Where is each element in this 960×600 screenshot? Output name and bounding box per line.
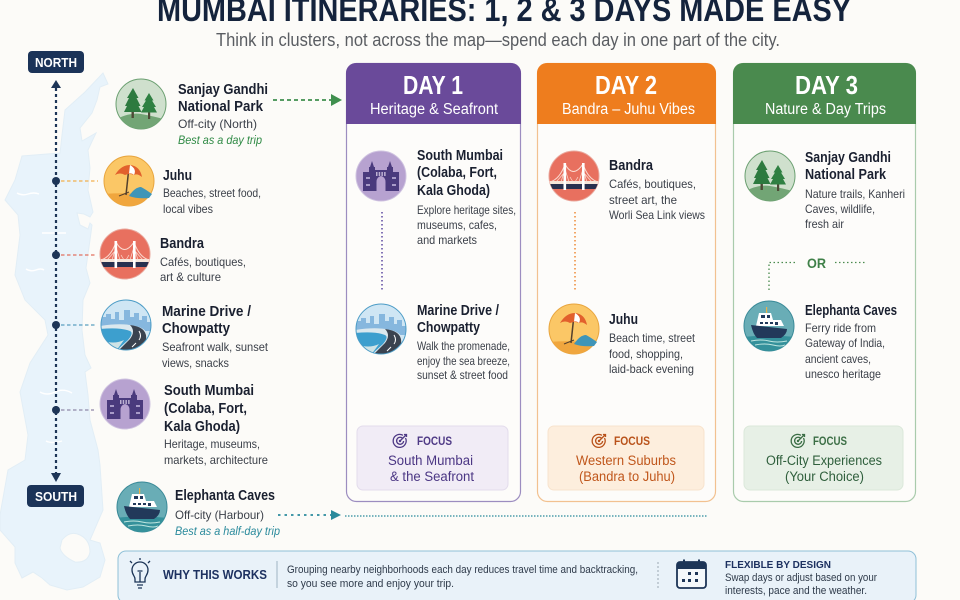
location: South Mumbai: (Colaba, Fort, bbox=[164, 401, 247, 417]
stop: Marine Drive: Marine Drive / bbox=[417, 303, 499, 319]
stop: South Mumbai: and markets bbox=[417, 233, 477, 247]
location: Bandra: Cafés, boutiques, bbox=[160, 255, 246, 269]
stop: Elephanta Caves bbox=[743, 301, 897, 381]
day 3 header: Nature & Day Trips bbox=[765, 101, 886, 118]
badge: north: NORTH bbox=[35, 56, 77, 70]
stop: Elephanta Caves: Elephanta Caves bbox=[805, 303, 897, 319]
focus: day 1: South Mumbai bbox=[388, 453, 473, 468]
location: Juhu: local vibes bbox=[163, 202, 213, 216]
stop: Bandra: street art, the bbox=[609, 193, 677, 207]
location: Elephanta Caves: Off-city (Harbour) bbox=[175, 508, 264, 522]
stop: Juhu: laid-back evening bbox=[609, 362, 694, 376]
stop: Marine Drive: Walk the promenade, bbox=[417, 339, 510, 353]
location: Sanjay Gandhi National Park bbox=[115, 79, 268, 147]
location: Sanjay Gandhi National Park: Off-city (North) bbox=[178, 117, 257, 131]
location: Marine Drive bbox=[100, 300, 269, 370]
focus: day 2: (Bandra to Juhu) bbox=[579, 469, 675, 484]
location: Marine Drive: Marine Drive / bbox=[162, 304, 251, 320]
location: Juhu: Beaches, street food, bbox=[163, 186, 261, 200]
stop: South Mumbai bbox=[356, 148, 516, 247]
map: Mumbai coastline bbox=[0, 73, 108, 590]
badge: north bbox=[28, 51, 84, 73]
location: South Mumbai: markets, architecture bbox=[164, 453, 268, 467]
stop: South Mumbai: South Mumbai bbox=[417, 148, 503, 164]
location: Juhu bbox=[103, 156, 261, 216]
day 1 header bbox=[346, 63, 521, 124]
why text bbox=[287, 564, 638, 590]
flexible by design: Swap days or adjust based on your bbox=[725, 572, 877, 584]
location: Elephanta Caves bbox=[116, 482, 280, 538]
subtitle: Think in clusters, not across the map—spend each day in one part of the city. bbox=[216, 30, 780, 50]
flexible by design: FLEXIBLE BY DESIGN bbox=[725, 559, 831, 571]
location: Bandra: art & culture bbox=[160, 270, 221, 284]
location: Sanjay Gandhi National Park: Sanjay Gandhi bbox=[178, 82, 268, 98]
stop: Sanjay Gandhi National Park: National Park bbox=[805, 167, 887, 183]
footer: why this works bbox=[118, 551, 916, 600]
stop: Marine Drive: sunset & street food bbox=[417, 368, 508, 382]
day 2 header: Bandra – Juhu Vibes bbox=[562, 101, 695, 118]
stop: Juhu: Juhu bbox=[609, 312, 638, 328]
stop: Sanjay Gandhi National Park: fresh air bbox=[805, 217, 844, 231]
stop: South Mumbai: Explore heritage sites, bbox=[417, 203, 516, 217]
stop: Marine Drive: enjoy the sea breeze, bbox=[417, 354, 510, 368]
stop: Juhu: food, shopping, bbox=[609, 347, 683, 361]
stop: South Mumbai: Kala Ghoda) bbox=[417, 183, 490, 199]
panel: day 1 bbox=[346, 63, 521, 502]
focus: day 3 bbox=[744, 426, 903, 490]
stop: Elephanta Caves: Ferry ride from bbox=[805, 321, 876, 335]
focus: day 1: FOCUS bbox=[417, 436, 452, 448]
stop: Bandra bbox=[548, 151, 705, 222]
north-south axis bbox=[51, 80, 98, 482]
focus: day 3: Off-City Experiences bbox=[766, 453, 882, 468]
location: Marine Drive: views, snacks bbox=[162, 356, 229, 370]
stop: Juhu: Beach time, street bbox=[609, 331, 696, 345]
location: Sanjay Gandhi National Park: National Park bbox=[178, 99, 264, 115]
stop: Marine Drive bbox=[355, 303, 510, 382]
focus: day 2: FOCUS bbox=[614, 436, 650, 448]
why text: so you see more and enjoy your trip. bbox=[287, 578, 454, 590]
day 2 header: DAY 2 bbox=[595, 70, 657, 100]
stop: South Mumbai: (Colaba, Fort, bbox=[417, 165, 497, 181]
location: Elephanta Caves: Best as a half-day trip bbox=[175, 524, 280, 538]
panel: day 2 bbox=[537, 63, 716, 502]
focus: day 3: (Your Choice) bbox=[785, 469, 864, 484]
location: Marine Drive: Seafront walk, sunset bbox=[162, 340, 269, 354]
day 2 header bbox=[537, 63, 716, 124]
stop: Sanjay Gandhi National Park: Sanjay Gandhi bbox=[805, 150, 891, 166]
stop: Elephanta Caves: Gateway of India, bbox=[805, 336, 885, 350]
focus: day 2 bbox=[548, 426, 704, 490]
stop: Elephanta Caves: unesco heritage bbox=[805, 367, 881, 381]
stop: Juhu bbox=[548, 304, 696, 376]
badge: south: SOUTH bbox=[35, 490, 77, 504]
location: Sanjay Gandhi National Park: Best as a day trip bbox=[178, 133, 262, 147]
focus: day 3: FOCUS bbox=[813, 436, 847, 448]
stop: Bandra: Worli Sea Link views bbox=[609, 208, 705, 222]
icon: calendar bbox=[677, 560, 706, 588]
stop: Sanjay Gandhi National Park: Caves, wildlife, bbox=[805, 202, 875, 216]
flexible by design bbox=[725, 559, 877, 597]
or connector bbox=[769, 255, 867, 290]
stop: Bandra: Bandra bbox=[609, 158, 654, 174]
why text: Grouping nearby neighborhoods each day reduces travel time and backtracking, bbox=[287, 564, 638, 576]
focus: day 1: & the Seafront bbox=[390, 469, 474, 484]
badge: south bbox=[27, 485, 84, 507]
location: Juhu: Juhu bbox=[163, 168, 192, 184]
location: Bandra: Bandra bbox=[160, 236, 205, 252]
flexible by design: interests, pace and the weather. bbox=[725, 585, 867, 597]
stop: Sanjay Gandhi National Park: Nature trails, Kanheri bbox=[805, 187, 905, 201]
stop: South Mumbai: museums, cafes, bbox=[417, 218, 497, 232]
or connector: OR bbox=[807, 255, 826, 271]
arrow: Elephanta to day 3 bbox=[278, 510, 707, 520]
day 3 header: DAY 3 bbox=[795, 70, 858, 100]
day 1 header: DAY 1 bbox=[403, 70, 463, 100]
why heading: WHY THIS WORKS bbox=[163, 567, 267, 582]
day 1 header: Heritage & Seafront bbox=[370, 101, 499, 118]
location: South Mumbai: Heritage, museums, bbox=[164, 437, 260, 451]
location: Marine Drive: Chowpatty bbox=[162, 321, 230, 337]
location: South Mumbai: South Mumbai bbox=[164, 383, 254, 399]
stop: Bandra: Cafés, boutiques, bbox=[609, 177, 696, 191]
location: Bandra bbox=[99, 229, 246, 284]
stop: Elephanta Caves: ancient caves, bbox=[805, 352, 871, 366]
panel: day 3 bbox=[733, 63, 916, 502]
stop: Marine Drive: Chowpatty bbox=[417, 320, 480, 336]
location: Elephanta Caves: Elephanta Caves bbox=[175, 488, 275, 504]
day 3 header bbox=[733, 63, 916, 124]
icon: light bulb bbox=[130, 558, 150, 588]
location: South Mumbai bbox=[100, 379, 268, 467]
focus: day 2: Western Suburbs bbox=[576, 453, 676, 468]
arrow: park to day 1 bbox=[273, 94, 342, 106]
stop: Sanjay Gandhi National Park bbox=[744, 150, 905, 231]
location: South Mumbai: Kala Ghoda) bbox=[164, 419, 240, 435]
focus: day 1 bbox=[357, 426, 508, 490]
